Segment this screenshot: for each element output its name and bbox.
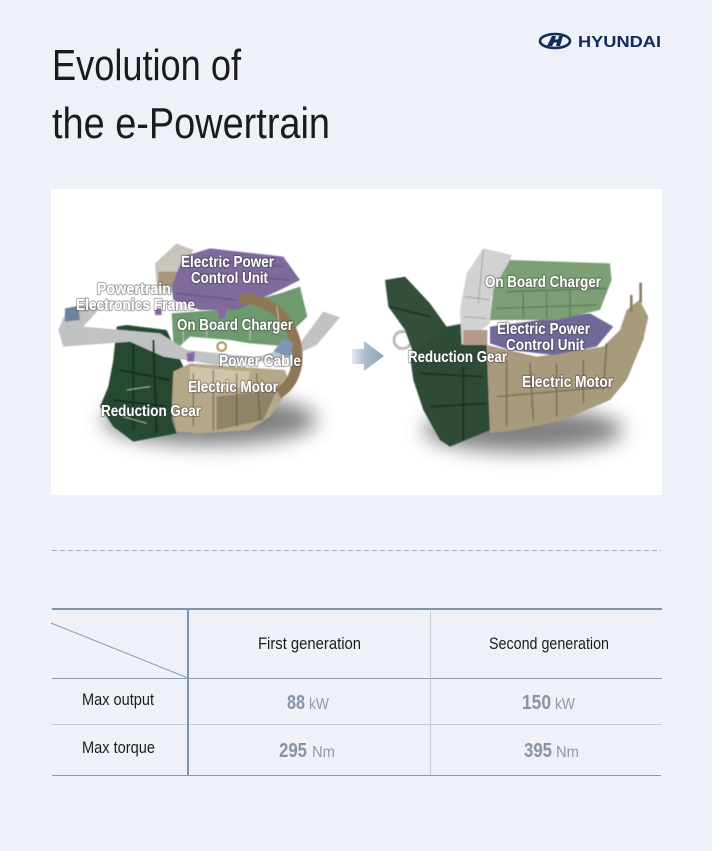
column header: first generation: First generation	[258, 635, 361, 653]
value: first generation max torque	[279, 740, 335, 762]
column header: second generation: Second generation	[489, 635, 609, 653]
illustration: first generation powertrain	[58, 243, 340, 445]
logo: Hyundai: HYUNDAI	[578, 34, 661, 51]
value: first generation max torque: Nm	[312, 744, 335, 761]
labels: first generation: Electric Motor	[188, 379, 278, 396]
value: second generation max output: 150	[522, 692, 551, 714]
panel: powertrain comparison image	[51, 189, 662, 495]
labels: first generation	[76, 254, 301, 420]
labels: first generation: Control Unit	[191, 270, 269, 287]
labels: second generation: Electric Power	[497, 321, 590, 338]
labels: first generation: Power Cable	[219, 353, 301, 370]
value: second generation max output: kW	[555, 696, 576, 713]
title: the e-Powertrain	[52, 99, 330, 148]
value: second generation max output	[522, 692, 576, 714]
value: second generation max torque: Nm	[556, 744, 579, 761]
labels: second generation: Reduction Gear	[408, 349, 507, 366]
labels: first generation: Electronics Frame	[76, 297, 195, 314]
table: generation comparison	[51, 609, 662, 776]
labels: second generation	[408, 274, 613, 391]
labels: second generation: On Board Charger	[485, 274, 601, 291]
value: second generation max torque: 395	[524, 740, 552, 762]
labels: second generation: Control Unit	[506, 337, 585, 354]
labels: first generation: Powertrain	[97, 281, 171, 298]
value: first generation max output: kW	[309, 696, 330, 713]
value: second generation max torque	[524, 740, 579, 762]
labels: first generation: Reduction Gear	[101, 403, 201, 420]
labels: second generation: Electric Motor	[522, 374, 613, 391]
labels: first generation: On Board Charger	[177, 317, 293, 334]
title: Evolution of	[52, 41, 242, 90]
illustration: second generation powertrain	[385, 248, 648, 452]
row header: max output: Max output	[82, 691, 154, 709]
row header: max torque: Max torque	[82, 739, 155, 757]
value: first generation max torque: 295	[279, 740, 307, 762]
arrow	[352, 341, 384, 371]
value: first generation max output: 88	[287, 692, 305, 714]
logo: Hyundai	[540, 34, 661, 51]
labels: first generation: Electric Power	[181, 254, 274, 271]
value: first generation max output	[287, 692, 330, 714]
title	[52, 41, 330, 148]
